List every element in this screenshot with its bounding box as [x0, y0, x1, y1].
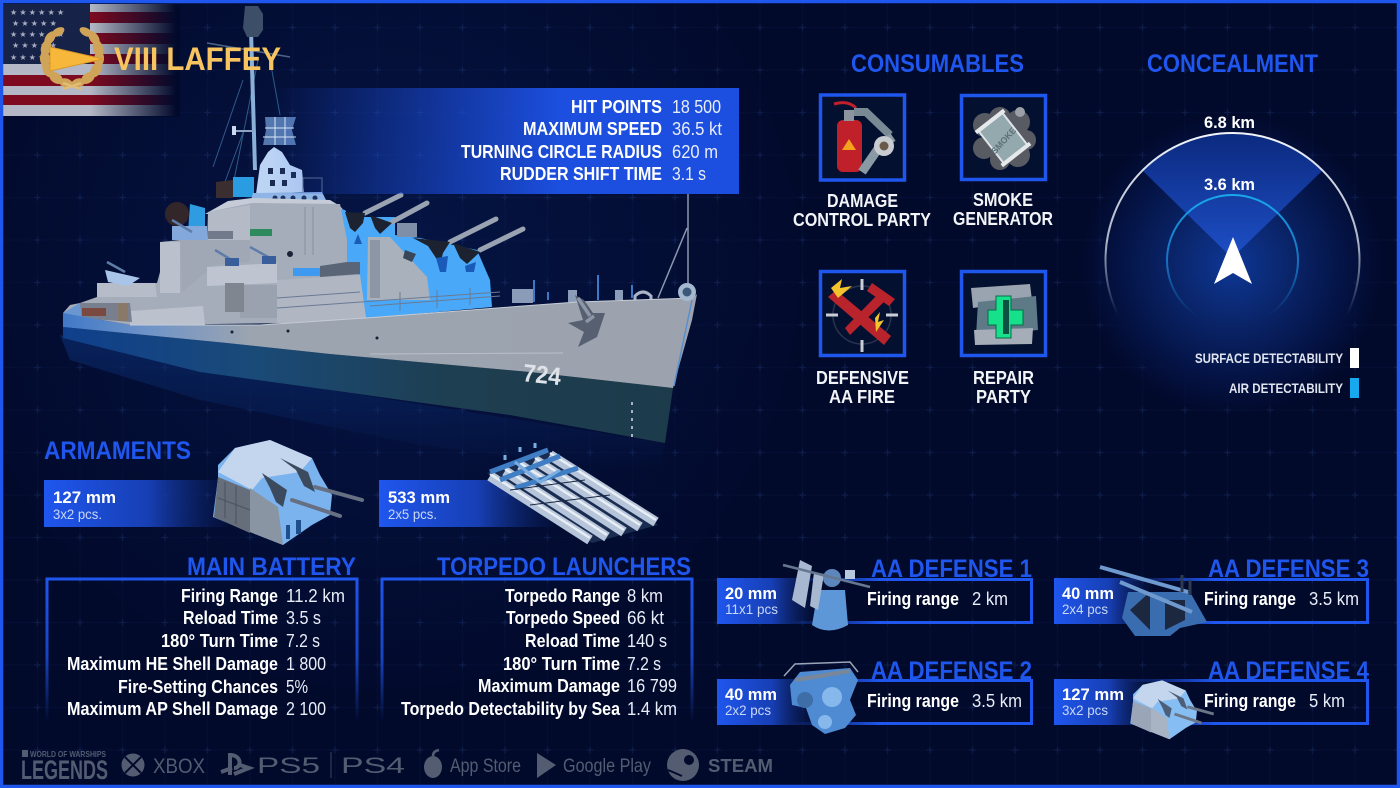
logo: Steam [667, 749, 773, 781]
superstructure panels [208, 205, 250, 240]
label: repair party: REPAIR [973, 368, 1034, 388]
panel: AA defense 4: Firing range [1204, 691, 1296, 711]
panel: main battery [47, 553, 357, 722]
panel: ship stats: 36.5 kt [672, 119, 722, 139]
panel: main battery: 11.2 km [286, 586, 345, 606]
panel: ship stats: RUDDER SHIFT TIME [500, 164, 662, 184]
flag: USA: ★ ★ ★ ★ ★ [12, 41, 57, 50]
bar: torpedo caliber: 2x5 pcs. [388, 506, 437, 522]
panel: torpedo launchers: 7.2 s [627, 654, 661, 674]
icon: defensive AA fire [820, 272, 904, 356]
ship reflection [60, 335, 665, 475]
bar: main battery caliber [44, 480, 234, 527]
mast and rigging [207, 6, 688, 298]
ship illustration [63, 6, 697, 443]
panel: ship stats: TURNING CIRCLE RADIUS [461, 142, 662, 162]
icon: 40 mm quad gun [1100, 567, 1207, 636]
flag: USA: ★ ★ ★ ★ ★ ★ [10, 30, 64, 39]
front tower face [367, 237, 430, 300]
dome [165, 202, 189, 226]
panel: AA defense 4: 3x2 pcs [1062, 702, 1108, 718]
label: smoke generator: SMOKE [973, 190, 1033, 210]
panel: AA defense 1 [717, 555, 1032, 630]
railing [277, 288, 500, 311]
panel: ship stats: HIT POINTS [571, 97, 662, 117]
panel: AA defense 3: 40 mm [1062, 584, 1114, 603]
title: VIII LAFFEY [114, 41, 281, 77]
chart: concealment radar [1082, 113, 1382, 415]
panel: AA defense 2: Firing range [867, 691, 959, 711]
bar: main battery caliber: 3x2 pcs. [53, 506, 102, 522]
icon: 40 mm twin gun [784, 662, 858, 734]
legend: detectability: AIR DETECTABILITY [1229, 380, 1344, 396]
bar: torpedo caliber: 533 mm [388, 488, 450, 507]
label: damage control party: CONTROL PARTY [793, 210, 931, 230]
panel: ship stats: MAXIMUM SPEED [523, 119, 662, 139]
icon: ship direction arrow [1214, 237, 1252, 284]
flag: USA: ★ ★ ★ ★ ★ ★ [10, 8, 64, 17]
footer: platform logos [21, 749, 773, 785]
panel: main battery: Firing Range [181, 586, 278, 606]
bow ring [678, 283, 696, 301]
logo: World of Warships Legends: WORLD OF WARSHIPS [30, 750, 107, 759]
logo: Xbox: XBOX [153, 755, 205, 778]
panel: torpedo launchers: 16 799 [627, 676, 677, 696]
panel: torpedo launchers: 8 km [627, 586, 663, 606]
flag: USA [3, 4, 180, 117]
panel: torpedo launchers: Torpedo Range [505, 586, 620, 606]
light AA guns [107, 220, 270, 272]
gun housings [345, 212, 365, 232]
panel: ship stats [270, 88, 739, 194]
label: smoke generator [953, 190, 1053, 229]
legend: detectability: SURFACE DETECTABILITY [1195, 350, 1344, 366]
panel: AA defense 4: 5 km [1309, 691, 1345, 711]
logo: Steam: STEAM [708, 756, 773, 776]
heading: concealment: CONCEALMENT [1147, 50, 1318, 78]
panel: main battery: 5% [286, 677, 308, 697]
logo: PS5 [221, 753, 320, 778]
panel: AA defense 2 [717, 657, 1032, 734]
panel: AA defense 2: 3.5 km [972, 691, 1022, 711]
logo: PS4 [331, 752, 405, 778]
anchor [568, 295, 605, 347]
heading: AA defense 1: AA DEFENSE 1 [871, 555, 1032, 583]
icon: smoke generator: SMOKE [989, 125, 1018, 156]
panel: torpedo launchers: Reload Time [525, 631, 620, 651]
label: surface range: 6.8 km [1204, 113, 1255, 132]
panel: AA defense 4: 127 mm [1062, 685, 1124, 704]
rank emblem [39, 25, 105, 89]
panel: ship stats: 18 500 [672, 97, 721, 117]
logo: World of Warships Legends: LEGENDS [21, 755, 108, 785]
panel: ship stats: 620 m [672, 142, 718, 162]
panel: AA defense 4 [1054, 657, 1369, 739]
panel: torpedo launchers [382, 553, 692, 722]
panel: torpedo launchers: Torpedo Speed [506, 608, 620, 628]
flag: USA: ★ ★ ★ ★ ★ [12, 19, 57, 28]
panel: main battery: Maximum HE Shell Damage [67, 654, 278, 674]
panel: main battery: 1 800 [286, 654, 326, 674]
panel: main battery: 7.2 s [286, 631, 320, 651]
heading: consumables: CONSUMABLES [851, 50, 1024, 78]
icon: smoke generator [962, 96, 1046, 180]
label: defensive AA fire: AA FIRE [829, 387, 895, 407]
logo: PS5: PS5 [257, 753, 320, 778]
hull upper [63, 294, 697, 388]
panel: main battery: 2 100 [286, 699, 326, 719]
label: repair party: PARTY [976, 387, 1031, 407]
heading: AA defense 2: AA DEFENSE 2 [871, 657, 1032, 685]
heading: AA defense 4: AA DEFENSE 4 [1208, 657, 1369, 685]
heading: armaments: ARMAMENTS [44, 437, 191, 465]
label: defensive AA fire [816, 368, 909, 407]
panel: ship stats: 3.1 s [672, 164, 706, 184]
draft marks [631, 402, 633, 438]
legend: detectability [1195, 348, 1359, 398]
hull number: 724 [522, 359, 562, 391]
superstructure base [63, 203, 366, 325]
panel: main battery: Reload Time [183, 608, 278, 628]
panel: torpedo launchers: 140 s [627, 631, 667, 651]
hull dark [63, 327, 673, 443]
logo: World of Warships Legends [21, 750, 108, 785]
label: defensive AA fire: DEFENSIVE [816, 368, 909, 388]
panel: AA defense 1: 11x1 pcs [725, 601, 778, 617]
heading: main battery: MAIN BATTERY [187, 553, 356, 581]
heading: torpedo launchers: TORPEDO LAUNCHERS [437, 553, 691, 581]
icon: 127 mm turret [1130, 680, 1214, 739]
gun barrels [365, 195, 523, 250]
upper bridge [256, 147, 304, 194]
panel: AA defense 2: 40 mm [725, 685, 777, 704]
panel: AA defense 3: 3.5 km [1309, 589, 1359, 609]
panel: AA defense 3: 2x4 pcs [1062, 601, 1108, 617]
bar: main battery caliber: 127 mm [53, 488, 116, 507]
panel: main battery: 180° Turn Time [161, 631, 278, 651]
logo: App Store: App Store [450, 756, 521, 777]
icon: torpedo launchers [487, 443, 658, 543]
label: air range: 3.6 km [1204, 175, 1255, 194]
panel: main battery: Maximum AP Shell Damage [67, 699, 278, 719]
icon: 20 mm gun [783, 560, 870, 630]
logo: App Store [424, 750, 521, 778]
logo: Xbox [122, 754, 205, 778]
logo: Google Play: Google Play [563, 756, 651, 777]
panel: AA defense 1: Firing range [867, 589, 959, 609]
icon: repair party [962, 272, 1046, 356]
heading: AA defense 3: AA DEFENSE 3 [1208, 555, 1369, 583]
panel: AA defense 1: 2 km [972, 589, 1008, 609]
panel: torpedo launchers: 180° Turn Time [503, 654, 620, 674]
icon: damage control party [820, 95, 904, 180]
flag: USA: ★ ★ ★ ★ ★ ★ [10, 53, 64, 62]
panel: AA defense 3 [1054, 555, 1369, 636]
panel: torpedo launchers: Torpedo Detectability by Sea [401, 699, 621, 719]
panel: torpedo launchers: 1.4 km [627, 699, 677, 719]
label: repair party [973, 368, 1034, 407]
label: smoke generator: GENERATOR [953, 209, 1053, 229]
panel: main battery: Fire-Setting Chances [118, 677, 278, 697]
logo: Google Play [537, 753, 651, 778]
blue lit area [330, 206, 492, 319]
panel: AA defense 3: Firing range [1204, 589, 1296, 609]
logo: PS4: PS4 [341, 753, 405, 778]
label: damage control party [793, 191, 931, 230]
icon: main gun turret [213, 440, 362, 545]
bar: torpedo caliber [379, 480, 559, 527]
label: damage control party: DAMAGE [827, 191, 898, 211]
panel: torpedo launchers: Maximum Damage [478, 676, 620, 696]
panel: main battery: 3.5 s [286, 608, 321, 628]
panel: AA defense 2: 2x2 pcs [725, 702, 771, 718]
panel: torpedo launchers: 66 kt [627, 608, 664, 628]
panel: AA defense 1: 20 mm [725, 584, 777, 603]
